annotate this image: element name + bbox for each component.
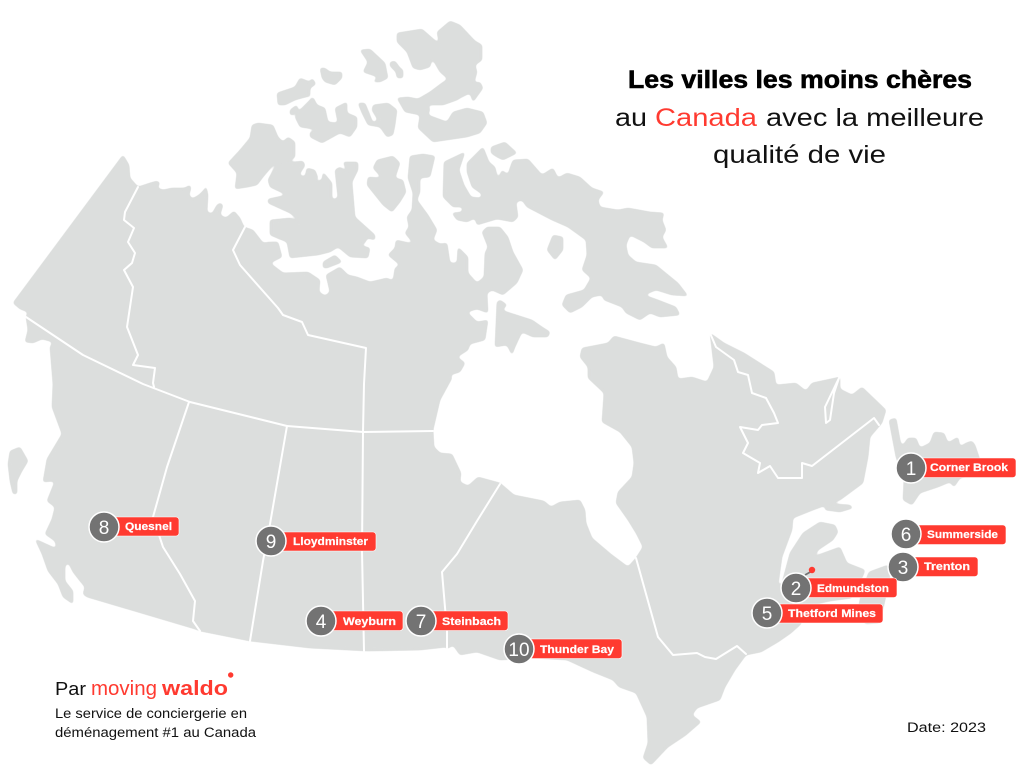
title: Canada bbox=[655, 104, 757, 132]
marker 3: Trenton: Trenton bbox=[924, 561, 970, 573]
credit: Par moving waldo: moving bbox=[91, 678, 157, 700]
marker 5: Thetford Mines: 5 bbox=[762, 604, 772, 625]
marker 8: Quesnel: 8 bbox=[99, 518, 109, 539]
Axel Heiberg Island bbox=[397, 29, 440, 70]
Melville Island bbox=[295, 97, 357, 143]
title: Les villes les moins chères bbox=[628, 66, 972, 94]
King William sliver island bbox=[323, 255, 342, 268]
marker 1: Corner Brook bbox=[896, 453, 1016, 483]
Prince Patrick Island bbox=[277, 78, 316, 105]
marker 4: Weyburn: 4 bbox=[316, 612, 327, 633]
marker 6: Summerside: Summerside bbox=[927, 529, 998, 541]
Amund Ringnes Island bbox=[360, 49, 388, 82]
marker 8: Quesnel: Quesnel bbox=[125, 521, 172, 533]
marker 7: Steinbach: 7 bbox=[416, 612, 426, 633]
mainland Canada bbox=[13, 154, 886, 765]
marker 2: Edmundston: 2 bbox=[791, 579, 801, 600]
marker 9: Lloydminster bbox=[256, 526, 376, 556]
credit: Par moving waldo: Par bbox=[55, 679, 86, 699]
marker 7: Steinbach bbox=[406, 606, 508, 636]
credit: Par moving waldo: waldo bbox=[161, 678, 228, 700]
Nova Scotia and Cape Breton bbox=[858, 565, 890, 624]
small Arctic island bbox=[390, 61, 403, 78]
marker 4: Weyburn bbox=[306, 606, 403, 636]
marker 6: Summerside: 6 bbox=[901, 525, 911, 546]
marker 1: Corner Brook: Corner Brook bbox=[930, 462, 1009, 474]
Baffin Island bbox=[443, 147, 688, 320]
marker 7: Steinbach: Steinbach bbox=[442, 616, 501, 628]
Victoria Island bbox=[268, 161, 375, 258]
marker 5: Thetford Mines bbox=[752, 598, 883, 628]
Eglinton Island bbox=[290, 105, 298, 115]
marker 1: Corner Brook: 1 bbox=[906, 459, 916, 480]
marker 6: Summerside bbox=[891, 519, 1006, 549]
marker 10: Thunder Bay: 10 bbox=[508, 640, 530, 661]
marker 4: Weyburn: Weyburn bbox=[343, 616, 396, 628]
Lake Melville outline bbox=[825, 378, 839, 423]
Southampton Island bbox=[495, 300, 550, 355]
Newfoundland bbox=[889, 418, 980, 505]
pin: red location dot bbox=[805, 567, 815, 575]
marker 2: Edmundston: Edmundston bbox=[817, 583, 889, 595]
credit: Par moving waldo bbox=[55, 672, 233, 700]
marker 9: Lloydminster: Lloydminster bbox=[293, 536, 369, 548]
marker 5: Thetford Mines: Thetford Mines bbox=[788, 608, 876, 620]
title: avec la meilleure bbox=[766, 104, 984, 132]
marker 10: Thunder Bay bbox=[504, 634, 622, 664]
Banks Island bbox=[228, 123, 295, 189]
Ellef Ringnes Island bbox=[320, 68, 342, 85]
title: au bbox=[615, 104, 647, 132]
Ellesmere and Devon Islands bbox=[397, 21, 487, 142]
marker 8: Quesnel bbox=[89, 512, 179, 542]
marker 2: Edmundston bbox=[781, 573, 897, 603]
marker 3: Trenton bbox=[888, 552, 978, 582]
tagline bbox=[55, 706, 257, 740]
territorial and provincial borders bbox=[26, 187, 879, 659]
marker 3: Trenton: 3 bbox=[898, 558, 908, 579]
Anticosti Island bbox=[825, 504, 853, 512]
tagline: déménagement #1 au Canada bbox=[55, 725, 257, 740]
Bathurst Island bbox=[358, 103, 397, 137]
Gaspé peninsula bbox=[782, 522, 838, 583]
title: qualité de vie bbox=[713, 141, 886, 169]
Bylot Island bbox=[491, 142, 517, 160]
marker 9: Lloydminster: 9 bbox=[266, 532, 276, 553]
title bbox=[615, 66, 984, 169]
marker 10: Thunder Bay: Thunder Bay bbox=[540, 644, 615, 656]
Prince of Wales Island bbox=[367, 156, 406, 212]
date: Date: 2023 bbox=[907, 720, 986, 735]
Haida Gwaii bbox=[8, 447, 28, 494]
tagline: Le service de conciergerie en bbox=[55, 706, 247, 721]
